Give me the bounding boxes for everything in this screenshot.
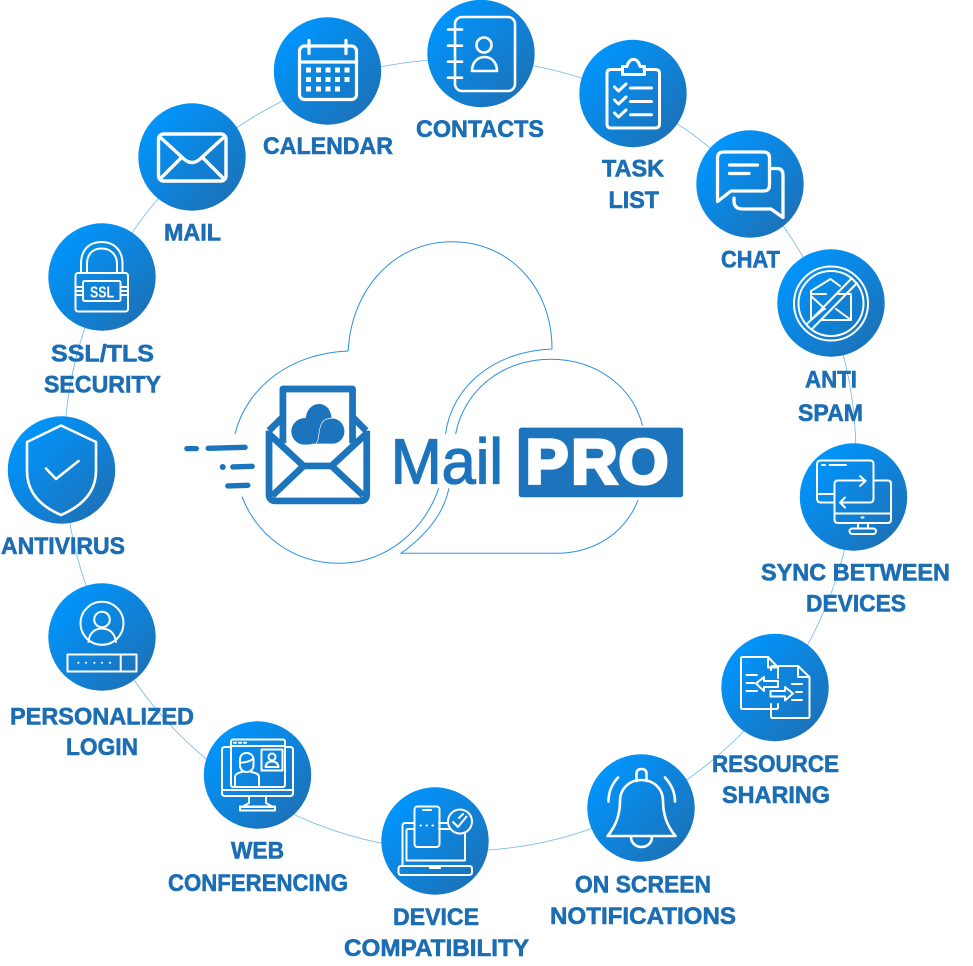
label: CHAT <box>721 247 780 274</box>
icon: shield <box>27 426 96 515</box>
label: PERSONALIZED <box>10 704 194 731</box>
feature: web conferencing <box>168 721 348 897</box>
icon: bell <box>608 769 676 847</box>
icon: address book <box>448 17 515 91</box>
feature: on screen notifications <box>550 754 736 930</box>
label: CONTACTS <box>416 116 544 143</box>
label: COMPATIBILITY <box>344 935 529 962</box>
label: LOGIN <box>66 734 138 761</box>
icon: envelope <box>158 134 226 181</box>
feature: calendar <box>263 17 393 160</box>
label: DEVICES <box>806 591 906 618</box>
label: DEVICE <box>393 904 479 931</box>
feature: personalized login <box>10 583 194 761</box>
logo word: Mail: Mail <box>391 426 503 497</box>
label: CONFERENCING <box>168 870 348 897</box>
icon: speech bubbles <box>718 152 783 218</box>
feature: anti spam <box>777 249 885 427</box>
icon: clipboard <box>607 59 660 128</box>
connecting ring <box>64 59 856 851</box>
central cloud outlines <box>235 242 643 563</box>
icon: devices with check <box>398 806 472 875</box>
logo badge: PRO: PRO <box>526 426 668 497</box>
feature: resource sharing <box>712 634 839 809</box>
feature: mail <box>138 103 246 246</box>
label: MAIL <box>164 220 221 246</box>
feature: task list <box>579 40 687 214</box>
label: LIST <box>608 187 659 214</box>
feature: antivirus <box>1 416 125 560</box>
icon: document exchange <box>741 657 810 718</box>
icon: synced monitors <box>817 460 891 534</box>
feature: contacts <box>416 0 544 143</box>
icon: padlock: SSL <box>90 284 114 302</box>
icon: crossed-out envelope <box>794 266 868 340</box>
label: WEB <box>231 838 284 864</box>
icon: envelope cloud <box>291 404 344 445</box>
feature: SSL/TLS security <box>44 223 161 398</box>
label: SYNC BETWEEN <box>761 560 950 587</box>
icon: speed dashes <box>187 447 252 486</box>
label: SHARING <box>722 782 830 809</box>
icon: calendar <box>300 40 356 100</box>
label: SSL/TLS <box>51 340 154 368</box>
icon: open envelope <box>269 389 367 501</box>
icon: video call <box>222 740 293 810</box>
label: ANTI <box>805 367 857 394</box>
label: SECURITY <box>44 372 161 398</box>
label: NOTIFICATIONS <box>550 903 736 930</box>
label: SPAM <box>798 400 863 427</box>
label: RESOURCE <box>712 751 839 778</box>
feature: device compatibility <box>344 787 529 962</box>
logo: Mail PRO <box>187 389 683 501</box>
icon: padlock <box>76 242 128 312</box>
label: TASK <box>602 156 664 183</box>
icon: user and password <box>68 602 136 672</box>
label: CALENDAR <box>263 133 393 160</box>
label: ON SCREEN <box>575 872 711 899</box>
feature: sync between devices <box>761 443 950 618</box>
label: ANTIVIRUS <box>1 533 125 560</box>
feature: chat <box>696 130 804 274</box>
